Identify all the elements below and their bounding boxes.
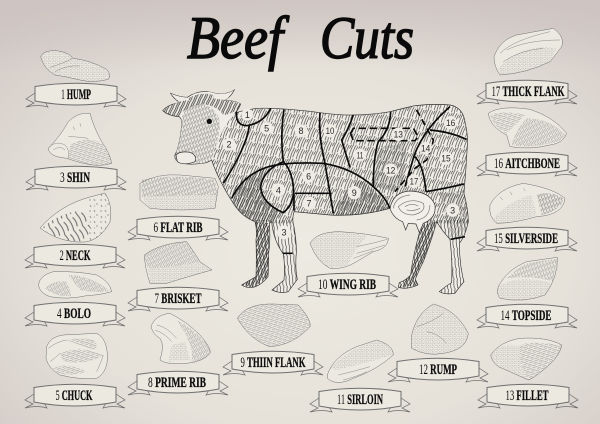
cow silhouette xyxy=(163,90,468,294)
ribbon: 11 sirloin xyxy=(310,388,410,412)
ribbon: 9 thiin flank xyxy=(223,351,323,375)
cut numbers: 6 xyxy=(306,171,311,181)
ribbon: 4 bolo xyxy=(25,302,125,326)
ribbon: 14 topside: 14 TOPSIDE xyxy=(500,308,552,324)
ribbon: 13 fillet: 13 FILLET xyxy=(506,388,548,404)
cut numbers: 7 xyxy=(306,199,311,209)
cut numbers: 1 xyxy=(245,110,250,120)
ribbon: 10 wing rib xyxy=(298,273,398,297)
cut numbers: 4 xyxy=(276,185,281,195)
ribbon: 10 wing rib: 10 WING RIB xyxy=(318,277,376,293)
ribbon: 15 silverside xyxy=(477,227,577,251)
icon: silverside xyxy=(490,183,565,223)
ribbon: 16 aitchbone: 16 AITCHBONE xyxy=(494,156,560,172)
icon: prime rib xyxy=(151,313,210,364)
udder xyxy=(390,191,435,233)
cut numbers: 16 xyxy=(446,118,455,128)
ribbon: 16 aitchbone xyxy=(477,152,577,176)
title xyxy=(187,5,414,71)
ribbon: 5 chuck: 5 CHUCK xyxy=(56,388,93,404)
icon: flat rib xyxy=(140,175,218,210)
ribbon: 6 flat rib xyxy=(128,216,228,240)
ribbon: 14 topside xyxy=(477,304,577,328)
cut numbers: 3 xyxy=(281,228,286,238)
ribbon: 3 shin xyxy=(26,166,126,190)
icon: brisket xyxy=(144,242,212,283)
icon: fillet xyxy=(491,338,562,380)
cut numbers: 10 xyxy=(326,126,334,136)
icon: thick flank xyxy=(494,28,562,75)
cow diagram xyxy=(163,90,473,297)
ribbon: 17 thick flank xyxy=(477,80,577,104)
ribbon: 5 chuck xyxy=(25,384,125,408)
cut lines xyxy=(223,107,467,253)
icon: sirloin xyxy=(327,340,393,382)
cut numbers: 2 xyxy=(226,140,231,150)
ribbon: 3 shin: 3 SHIN xyxy=(60,170,90,186)
cut numbers: 3 xyxy=(450,205,455,215)
ribbon: 12 rump xyxy=(388,358,488,382)
ribbon: 7 brisket: 7 BRISKET xyxy=(154,291,202,307)
eye xyxy=(207,119,212,124)
cut numbers xyxy=(223,109,459,239)
cut numbers: 13 xyxy=(394,130,403,140)
ribbon: 8 prime rib xyxy=(128,371,228,395)
ribbon: 2 neck: 2 NECK xyxy=(60,248,91,264)
icon: chuck xyxy=(46,333,107,379)
ribbon: 9 thiin flank: 9 THIIN FLANK xyxy=(240,355,306,371)
ribbon: 4 bolo: 4 BOLO xyxy=(57,306,91,322)
cow hair texture xyxy=(163,90,473,297)
title: Cuts xyxy=(320,5,414,71)
cut numbers: 12 xyxy=(386,165,395,175)
icon: thin flank xyxy=(237,304,310,347)
icon: wing rib xyxy=(310,232,388,269)
icon: shin xyxy=(48,113,112,165)
cut numbers: 11 xyxy=(357,150,363,160)
icon: neck xyxy=(40,193,111,242)
icon: bolo xyxy=(38,272,112,298)
cut numbers: 17 xyxy=(410,176,418,186)
ribbon: 1 hump xyxy=(26,83,126,107)
ribbon: 2 neck xyxy=(25,244,125,268)
title: Beef xyxy=(187,5,290,71)
icon: topside xyxy=(497,257,557,300)
ribbon: 12 rump: 12 RUMP xyxy=(419,362,457,378)
ribbon: 1 hump: 1 HUMP xyxy=(61,87,91,103)
cut numbers: 8 xyxy=(298,126,303,136)
cut numbers: 5 xyxy=(264,124,269,134)
cut numbers: 14 xyxy=(421,144,430,154)
ribbon: 6 flat rib: 6 FLAT RIB xyxy=(154,220,202,236)
muzzle xyxy=(176,152,196,164)
ribbon: 11 sirloin: 11 SIRLOIN xyxy=(337,392,383,408)
ribbon: 15 silverside: 15 SILVERSIDE xyxy=(494,231,558,247)
meat icons: left column xyxy=(41,51,112,165)
ribbon: 7 brisket xyxy=(128,287,228,311)
cut numbers: 9 xyxy=(352,188,357,198)
icon: aitchbone xyxy=(488,108,567,148)
icon: rump xyxy=(412,304,468,354)
ribbon: 13 fillet xyxy=(478,384,578,408)
icon: hump xyxy=(41,51,110,82)
ribbon: 8 prime rib: 8 PRIME RIB xyxy=(148,375,206,391)
cut numbers: 15 xyxy=(441,154,451,164)
